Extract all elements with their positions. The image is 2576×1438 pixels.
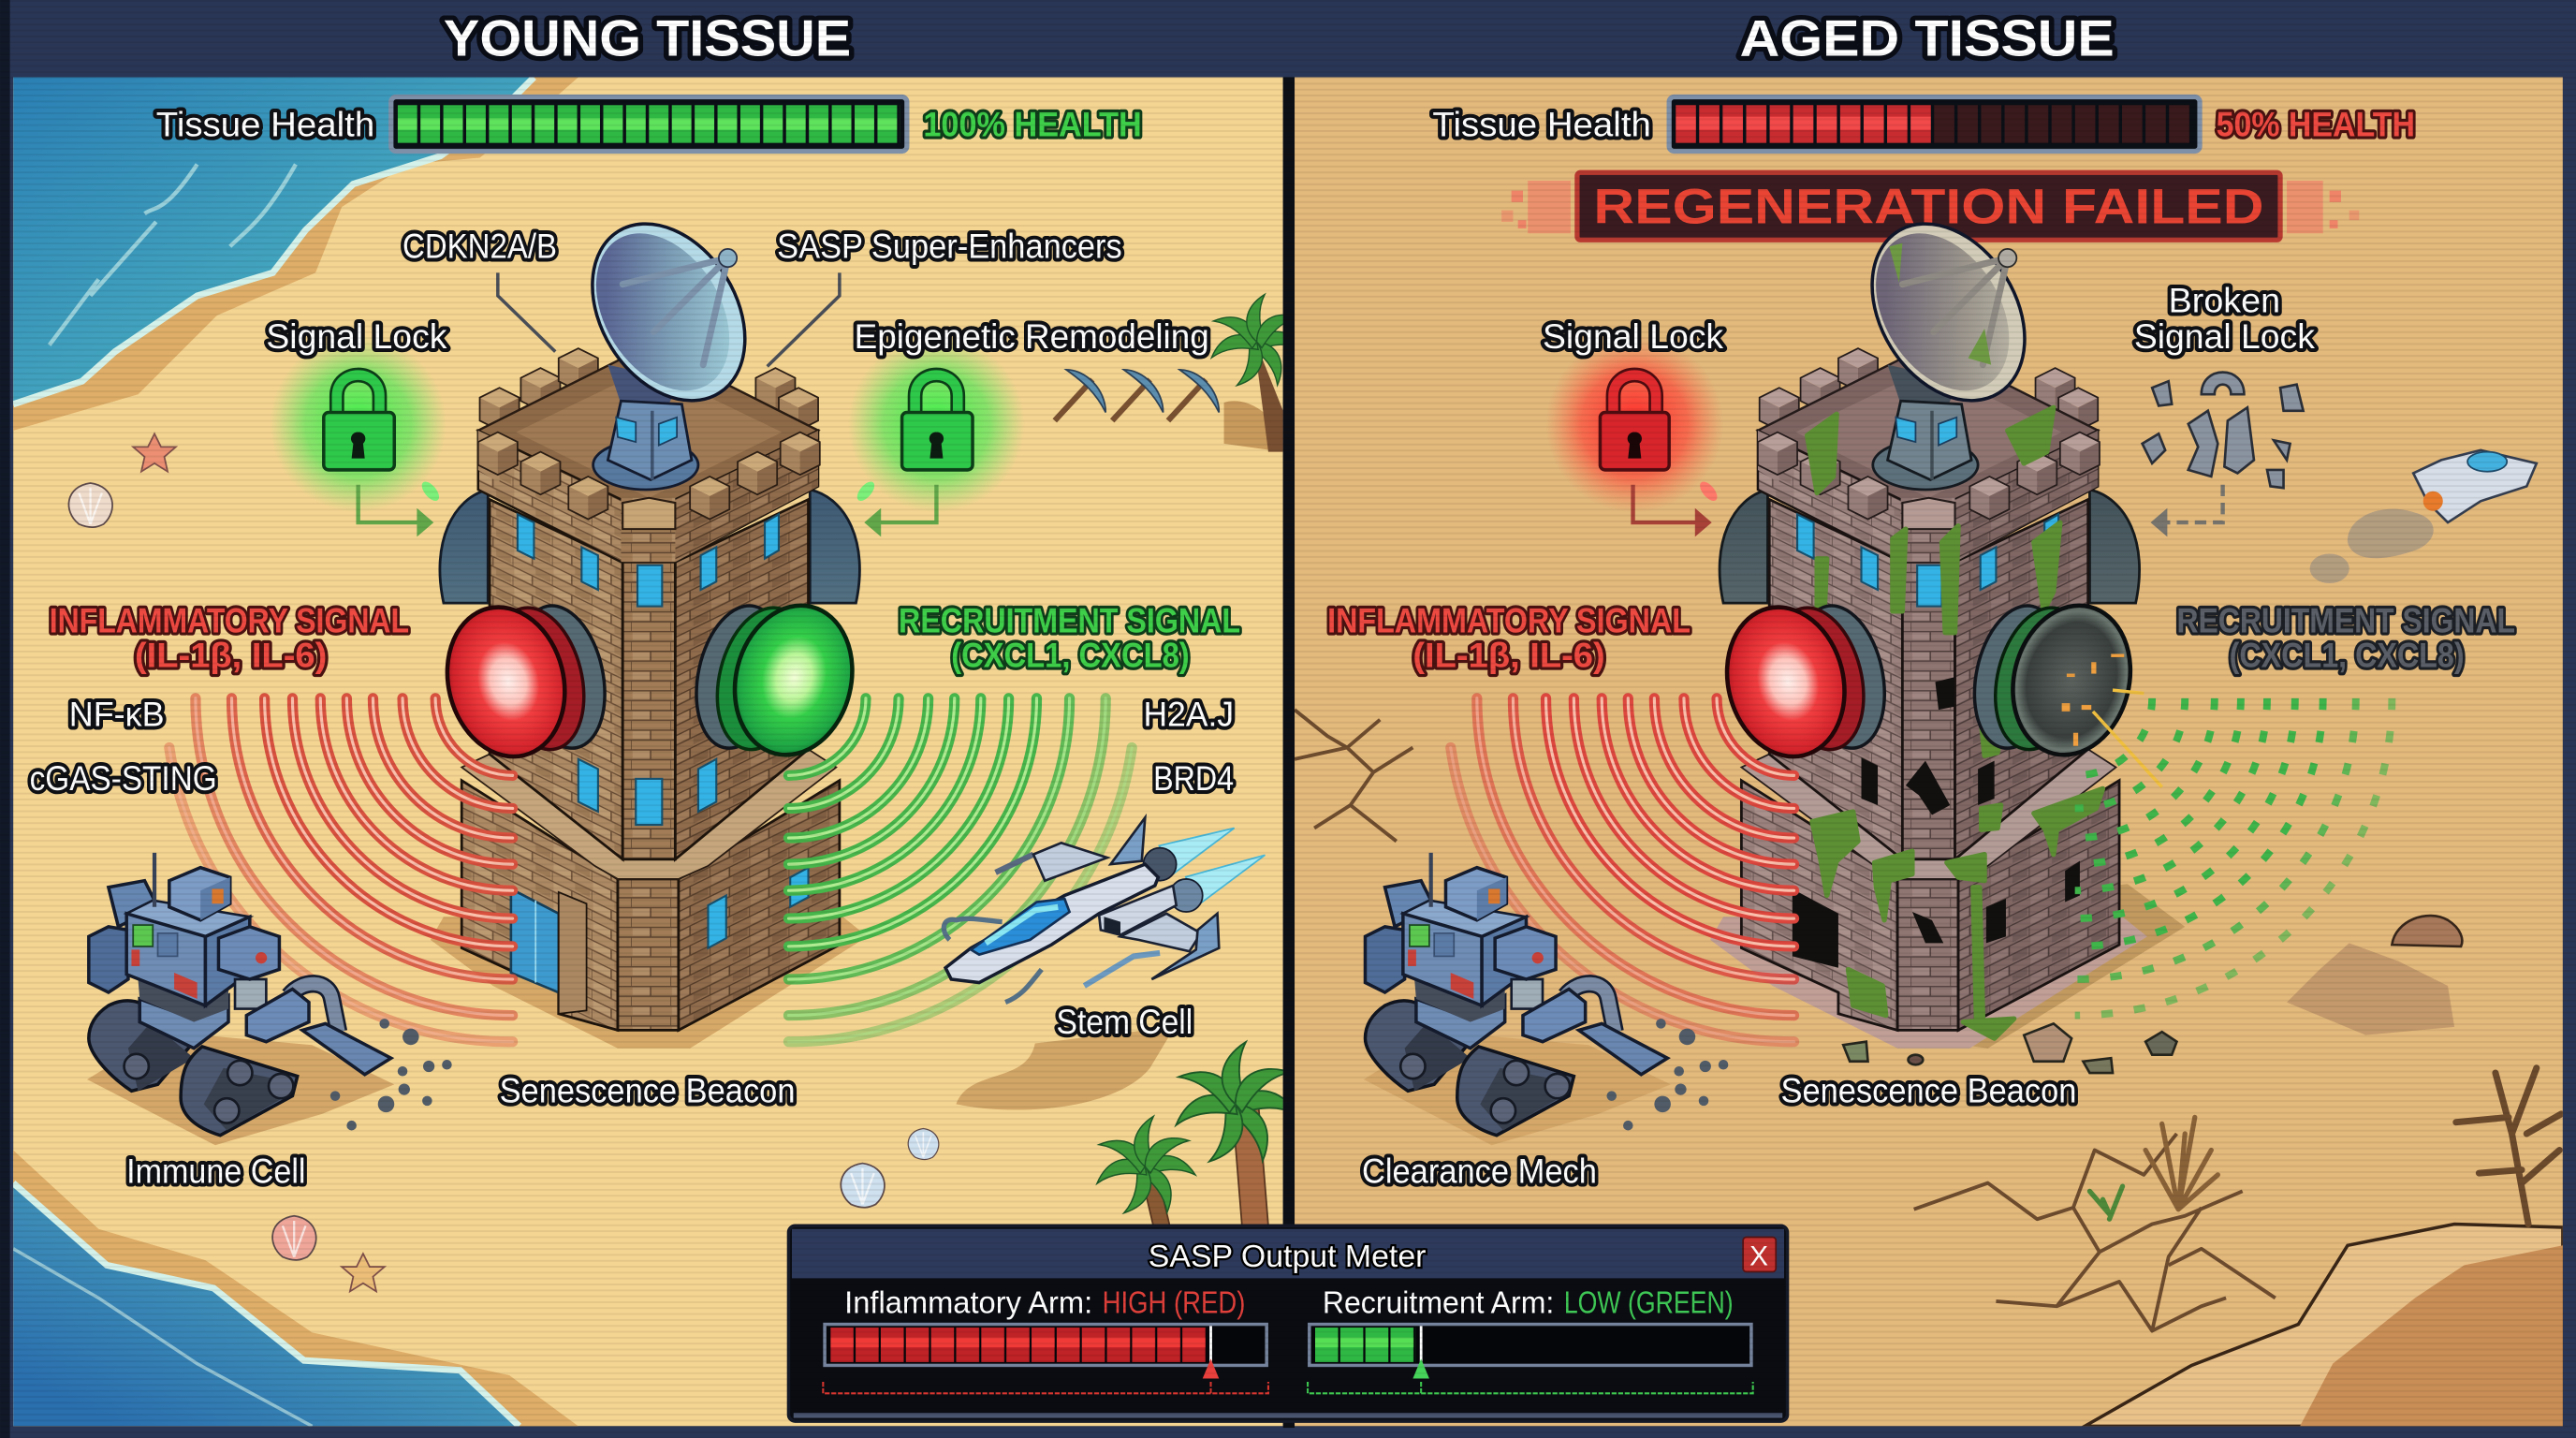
labels young: Signal Lock (266, 317, 447, 356)
labels aged: Signal Lock (2134, 317, 2315, 356)
arrow: left lock to tower (359, 478, 442, 533)
dry plant (2089, 1117, 2217, 1219)
labels young: Tissue Health (156, 106, 374, 144)
labels young: BRD4 (1153, 759, 1234, 798)
lock: signal lock right (848, 335, 1025, 513)
title: aged tissue: AGED TISSUE (1740, 10, 2115, 67)
rocks near tower (1843, 1023, 2176, 1073)
recruitment bar (1308, 1325, 1753, 1393)
decoration: starfish and shells (68, 433, 939, 1291)
aged satellite dish (1841, 196, 2056, 429)
low green label: LOW (GREEN) (1564, 1285, 1734, 1320)
broken signal lock debris (2143, 373, 2304, 488)
labels aged: Signal Lock (1543, 317, 1724, 356)
inflammatory arm label: Inflammatory Arm: (844, 1285, 1092, 1320)
clearance mech robot (1364, 853, 1728, 1145)
health bar aged (1669, 97, 2200, 151)
sand ground (13, 77, 1283, 1426)
labels young (30, 106, 1240, 1191)
damage holes (1793, 677, 2080, 968)
icons: pickaxes (1055, 370, 1219, 420)
labels aged: 50% HEALTH (2217, 106, 2415, 144)
labels aged: Broken (2169, 281, 2280, 319)
labels young: Stem Cell (1057, 1003, 1193, 1041)
labels young: cGAS-STING (30, 759, 217, 798)
dry patch and rocks (2287, 916, 2462, 1035)
panel: SASP output meter (788, 1225, 1788, 1421)
close button: X (1749, 1240, 1768, 1271)
labels aged: (IL-1β, IL-6) (1412, 637, 1605, 675)
labels aged: Tissue Health (1432, 106, 1651, 144)
immune cell robot (87, 853, 452, 1145)
center divider (1283, 77, 1295, 1428)
labels aged (1327, 106, 2515, 1191)
door frame (559, 892, 587, 1014)
meter title: SASP Output Meter (1149, 1240, 1426, 1274)
door (511, 888, 559, 992)
labels aged: RECRUITMENT SIGNAL (2176, 602, 2515, 640)
ground cracks (1295, 710, 2276, 1331)
labels young: 100% HEALTH (923, 106, 1142, 144)
leader lines (498, 272, 840, 366)
ocean: top-left shore (13, 77, 578, 431)
health bar young (391, 97, 907, 151)
ocean: bottom-left shore (13, 1151, 578, 1426)
red inflammatory signal waves (169, 698, 513, 1042)
title: young tissue: YOUNG TISSUE (444, 10, 851, 67)
red speaker (446, 604, 607, 758)
high red label: HIGH (RED) (1103, 1285, 1245, 1320)
arrow: broken lock dashed (2154, 485, 2223, 533)
banner: regeneration failed (1501, 172, 2359, 240)
panel: young tissue beach (13, 77, 1304, 1426)
labels young: H2A.J (1144, 696, 1234, 734)
shadow: stem cell (956, 1027, 1175, 1110)
tower shadow aged (1973, 884, 2185, 1049)
tower windows (518, 514, 809, 948)
broken green speaker (1962, 593, 2162, 787)
labels young: RECRUITMENT SIGNAL (899, 602, 1240, 640)
senescence beacon tower (431, 196, 868, 1049)
red speaker aged (1712, 594, 1896, 770)
arrow: red lock to tower (1633, 478, 1720, 533)
labels aged: INFLAMMATORY SIGNAL (1327, 602, 1690, 640)
labels aged: Clearance Mech (1362, 1152, 1597, 1191)
red inflammatory signal waves aged (1451, 698, 1794, 1042)
moss (1808, 407, 2102, 1038)
stem cell ship (944, 817, 1265, 1003)
labels young: (IL-1β, IL-6) (135, 637, 327, 675)
green recruitment signal waves (788, 698, 1132, 1042)
close button (1743, 1238, 1776, 1271)
labels young: INFLAMMATORY SIGNAL (50, 602, 409, 640)
labels aged: (CXCL1, CXCL8) (2230, 637, 2465, 675)
labels young: SASP Super-Enhancers (777, 227, 1122, 266)
arrow: right lock to tower (854, 478, 936, 533)
green speaker (695, 603, 855, 757)
green recruitment signal waves broken (2075, 698, 2392, 1016)
cliff (2085, 1224, 2563, 1426)
stem cell ship damaged with smoke (2310, 450, 2537, 583)
panel: aged tissue desert (1295, 77, 2563, 1426)
labels young: CDKN2A/B (402, 227, 557, 266)
labels young: Senescence Beacon (500, 1072, 795, 1110)
satellite dish (591, 222, 747, 403)
senescence beacon tower aged (1710, 196, 2176, 1073)
labels young: Epigenetic Remodeling (855, 317, 1209, 356)
inflammatory bar (823, 1325, 1268, 1393)
labels young: (CXCL1, CXCL8) (951, 637, 1190, 675)
lock: signal lock red (1546, 335, 1723, 513)
desert ground (1295, 77, 2563, 1426)
lock: signal lock left (270, 335, 446, 513)
recruitment arm label: Recruitment Arm: (1323, 1285, 1554, 1320)
labels young: NF-κB (69, 696, 165, 734)
dead tree (2456, 1068, 2561, 1224)
palm trees (1095, 292, 1283, 1225)
banner: regeneration failed: REGENERATION FAILED (1593, 180, 2263, 235)
labels young: Immune Cell (126, 1152, 305, 1191)
labels aged: Senescence Beacon (1781, 1072, 2076, 1110)
